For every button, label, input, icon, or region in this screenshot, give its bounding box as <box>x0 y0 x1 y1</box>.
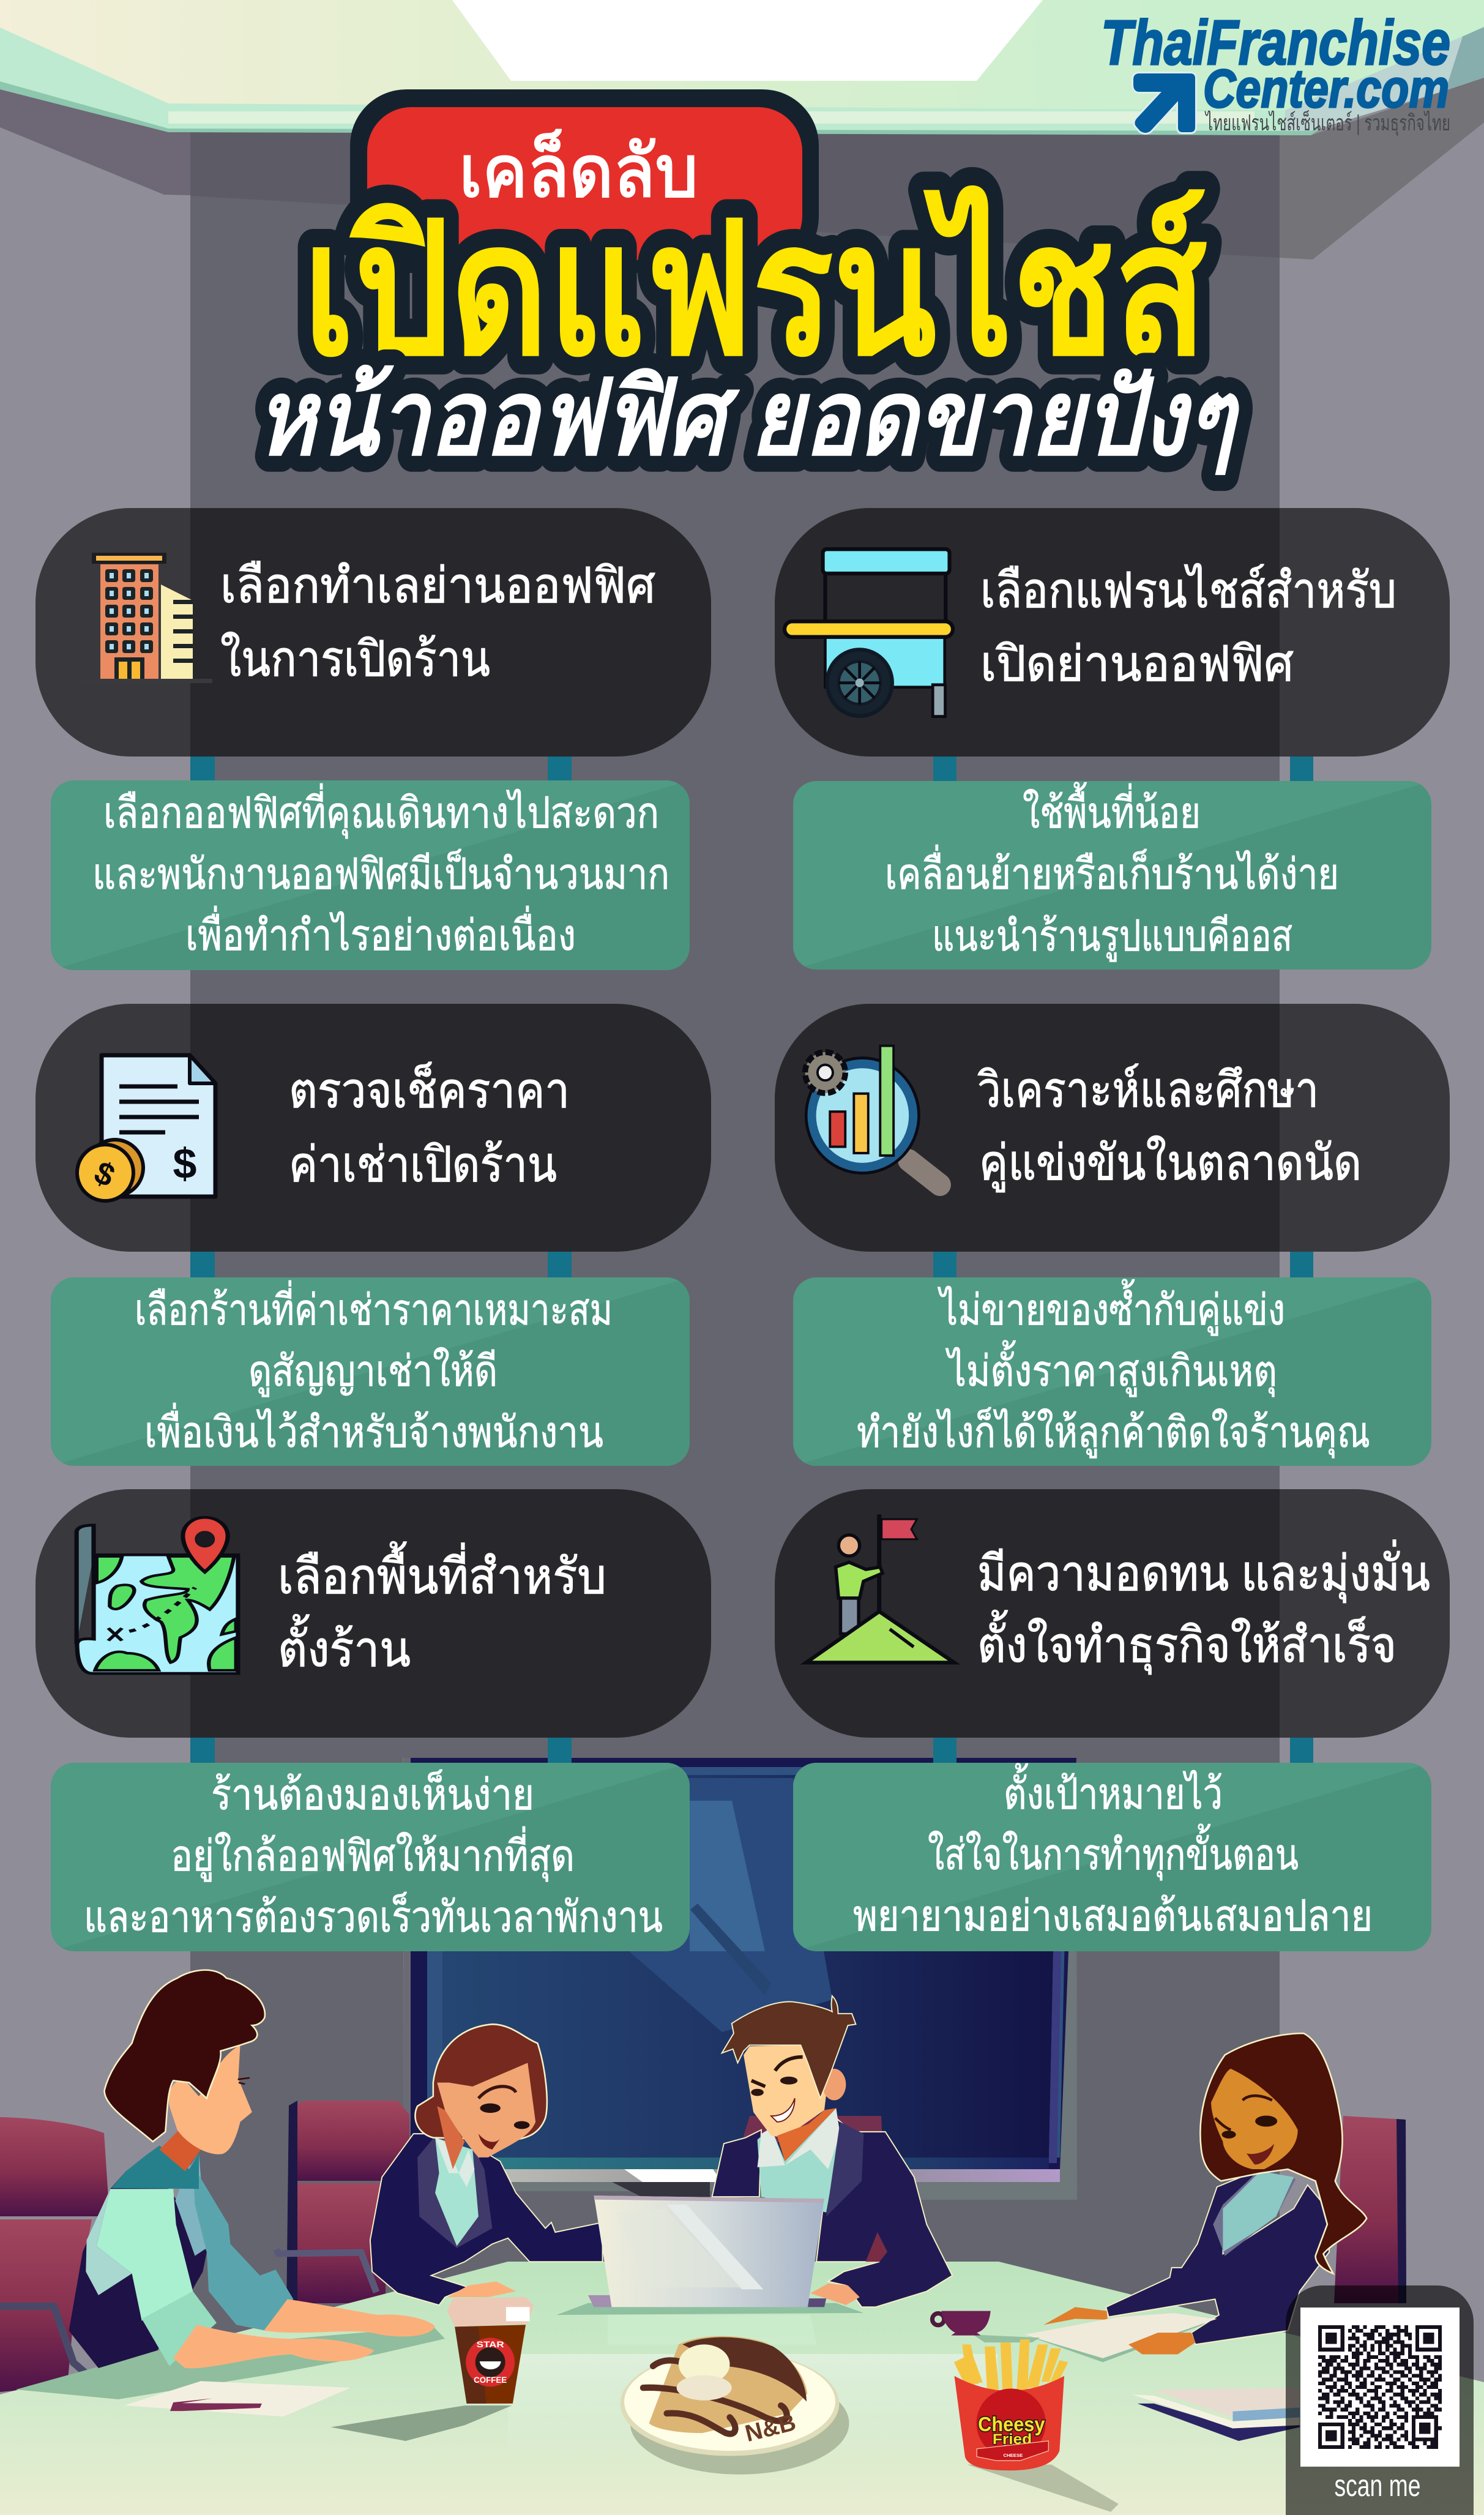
panel: competitor advice: ไม่ตั้งราคาสูงเกินเหตุ <box>945 1340 1277 1397</box>
heading: มีความอดทน และมุ่งมั่น <box>977 1540 1430 1603</box>
papers and pen on table <box>124 2381 351 2416</box>
books on table <box>1132 2388 1300 2441</box>
heading <box>977 1063 1362 1192</box>
heading: ตรวจเช็คราคา <box>289 1061 570 1118</box>
panel: area advice: และอาหารต้องรวดเร็วทันเวลาพักงาน <box>84 1892 663 1941</box>
panel: location advice: เพื่อทำกำไรอย่างต่อเนื่อง <box>185 906 576 959</box>
fries box with Cheesy Fried logo <box>954 2339 1119 2512</box>
heading: เปิดย่านออฟฟิศ <box>980 637 1294 691</box>
badge text: เคล็ดลับ <box>459 129 698 212</box>
office window <box>403 1758 1077 2262</box>
heading: เลือกพื้นที่สำหรับ <box>278 1541 606 1604</box>
panel: location advice: เลือกออฟฟิศที่คุณเดินทางไปสะดวก <box>103 783 659 839</box>
heading: เลือกแฟรนไชส์สำหรับ <box>980 563 1396 618</box>
meeting table <box>0 2262 1484 2515</box>
heading: ค่าเช่าเปิดร้าน <box>289 1137 557 1192</box>
heading: ในการเปิดร้าน <box>220 631 490 686</box>
heading: คู่แข่งขันในตลาดนัด <box>979 1135 1362 1192</box>
document on table <box>1024 2313 1217 2358</box>
fries box with Cheesy Fried logo: Cheesy <box>978 2413 1045 2436</box>
panel: rent advice: เพื่อเงินไว้สำหรับจ้างพนักงาน <box>144 1403 603 1456</box>
person: man in mint shirt, left <box>69 1970 435 2368</box>
fries box with Cheesy Fried logo: Fried <box>993 2431 1032 2448</box>
panel: location advice: และพนักงานออฟฟิศมีเป็นจำนวนมาก <box>92 849 669 898</box>
panel: check rent <box>35 1004 711 1252</box>
panel: rent advice <box>51 1277 690 1466</box>
heading <box>220 558 655 686</box>
panel: rent advice: เลือกร้านที่ค่าเช่าราคาเหมาะสม <box>135 1280 613 1334</box>
person: woman with brown hair <box>370 2024 603 2305</box>
panel: competitor advice <box>793 1277 1431 1466</box>
panel: goal advice: ตั้งเป้าหมายไว้ <box>1004 1763 1223 1818</box>
straps between panels <box>190 757 1313 1763</box>
panel: goal advice: ใส่ใจในการทำทุกขั้นตอน <box>928 1823 1299 1881</box>
panel: franchise type advice: แนะนำร้านรูปแบบคีออส <box>932 912 1292 962</box>
panel: competitor advice: ทำยังไงก็ได้ให้ลูกค้าติดใจร้านคุณ <box>857 1407 1370 1459</box>
panel: goal advice <box>793 1763 1431 1951</box>
meeting chairs <box>0 2101 1406 2392</box>
heading <box>977 1540 1430 1675</box>
coffee cup with STAR COFFEE logo: COFFEE <box>474 2375 507 2385</box>
QR code panel <box>1286 2285 1474 2515</box>
panel: area advice <box>51 1763 690 1951</box>
panel: area advice: ร้านต้องมองเห็นง่าย <box>211 1769 534 1818</box>
title badge: red pill <box>350 89 819 273</box>
panel: rent advice: ดูสัญญาเช่าให้ดี <box>248 1347 498 1397</box>
crepe on plate: N&B <box>742 2409 799 2447</box>
icon: bill and coins <box>77 1055 215 1201</box>
icon: map with pin <box>76 1517 238 1673</box>
main title: เปิดแฟรนไชส์ <box>303 184 1207 392</box>
panel: area advice: อยู่ใกล้ออฟฟิศให้มากที่สุด <box>171 1826 575 1882</box>
heading: เลือกทำเลย่านออฟฟิศ <box>220 558 655 613</box>
subtitle: หน้าออฟฟิศ ยอดขายปังๆ <box>256 359 1240 477</box>
coffee cup with STAR COFFEE logo <box>331 2297 534 2441</box>
panel: competitor advice: ไม่ขายของซ้ำกับคู่แข่ง <box>938 1279 1285 1336</box>
panel: franchise type advice <box>793 781 1431 970</box>
heading: วิเคราะห์และศึกษา <box>977 1063 1319 1117</box>
icon: food cart <box>785 549 953 717</box>
icon: bill and coins: $ <box>173 1140 196 1187</box>
crepe on plate <box>621 2336 849 2475</box>
person: woman with long dark hair <box>1024 2033 1367 2362</box>
scan me label: scan me <box>1334 2468 1421 2503</box>
fries box with Cheesy Fried logo: Snacks <box>1004 2444 1023 2450</box>
QR code <box>1318 2325 1442 2449</box>
heading <box>980 563 1396 691</box>
icon: bill and coins: $ <box>89 1154 120 1194</box>
panel: franchise type advice: ใช้พื้นที่น้อย <box>1023 782 1201 837</box>
logo: ThaiFranchise Center.com <box>1101 7 1450 136</box>
coffee cup with STAR COFFEE logo: STAR <box>477 2339 504 2349</box>
person: man behind laptop <box>712 1996 952 2307</box>
fries box with Cheesy Fried logo: CHEESE <box>1004 2453 1023 2458</box>
panel: choose franchise type <box>775 508 1450 757</box>
panel: choose office location <box>35 508 711 757</box>
panel: patience and determination <box>775 1489 1450 1738</box>
icon: logo arrow <box>1133 73 1195 133</box>
panel: goal advice: พยายามอย่างเสมอต้นเสมอปลาย <box>853 1892 1373 1940</box>
icon: magnifier with bar chart <box>805 1046 940 1185</box>
icon: person on summit with flag <box>806 1514 954 1662</box>
panel: choose shop area <box>35 1489 711 1738</box>
heading: ตั้งใจทำธุรกิจให้สำเร็จ <box>977 1610 1396 1675</box>
icon: office building <box>81 553 212 683</box>
heading <box>278 1541 606 1676</box>
heading <box>289 1061 570 1192</box>
coffee cup on saucer <box>932 2311 1040 2342</box>
panel: franchise type advice: เคลื่อนย้ายหรือเก็บร้านได้ง่าย <box>885 845 1339 898</box>
skylight <box>452 0 1043 81</box>
laptop <box>556 2195 863 2344</box>
panel: location advice <box>51 780 690 970</box>
heading: ตั้งร้าน <box>278 1614 411 1676</box>
panel: analyse competitors <box>775 1004 1450 1252</box>
